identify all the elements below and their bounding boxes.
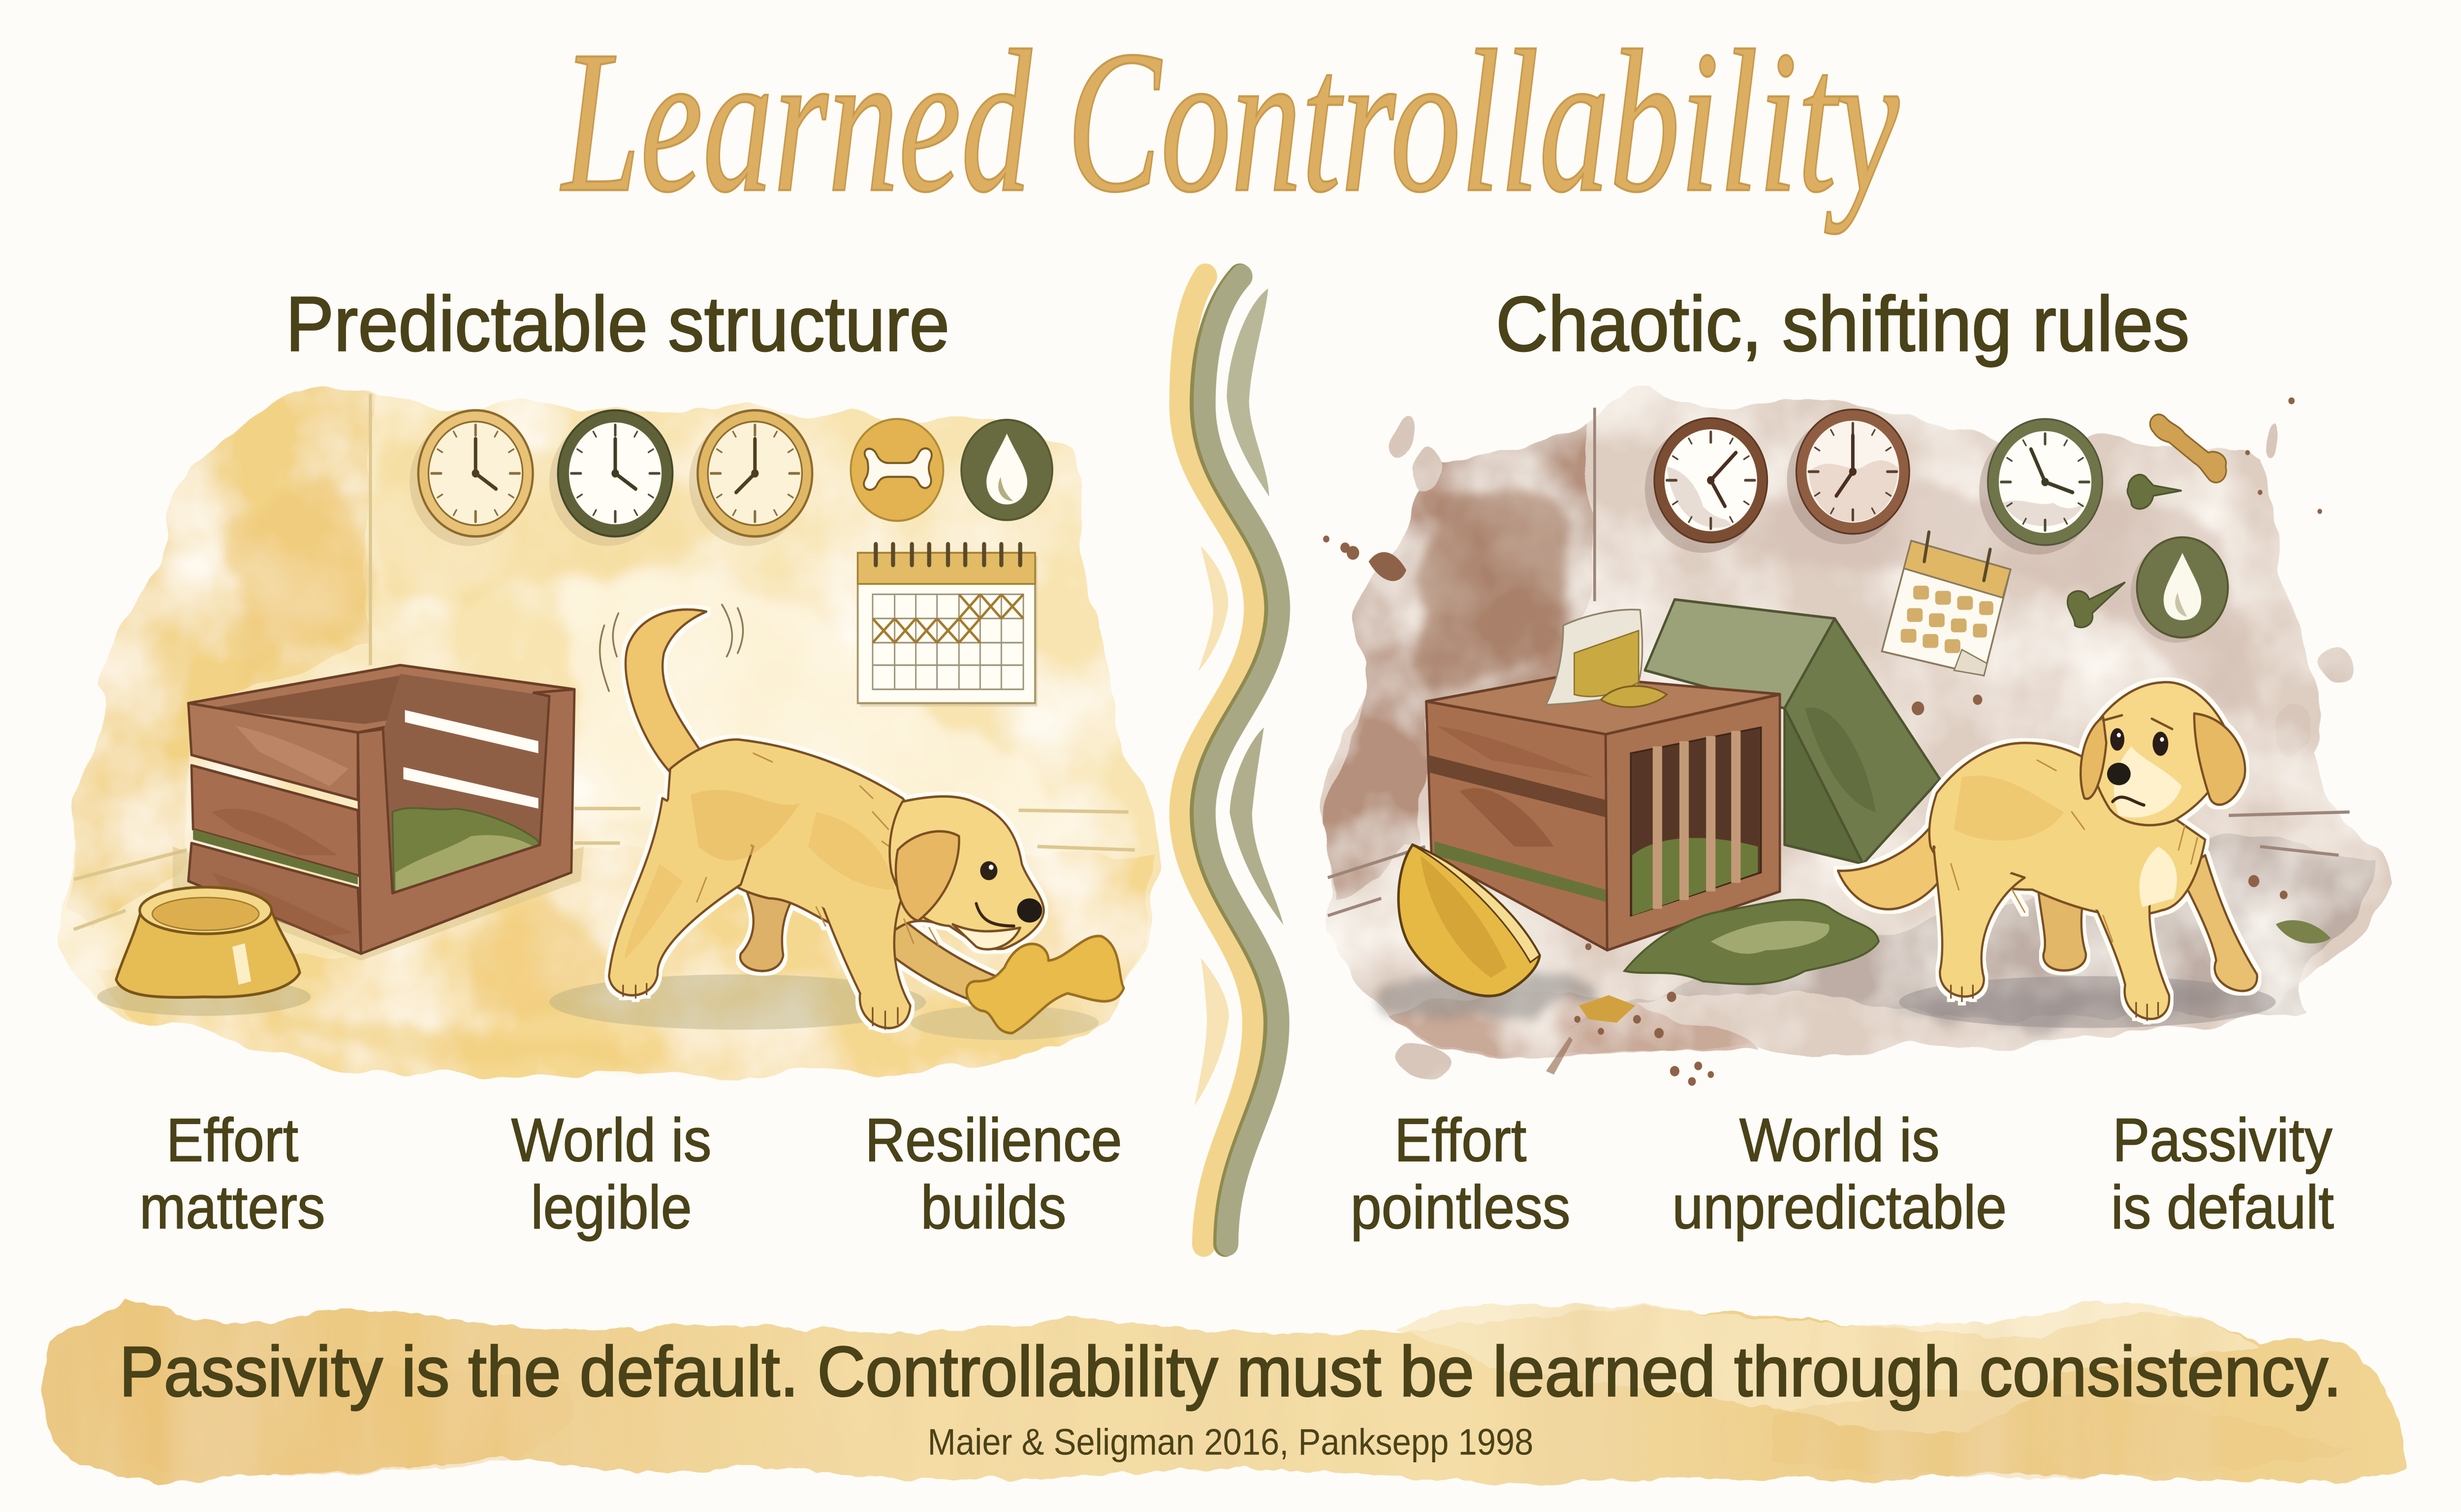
damaged crate [1426,675,1780,950]
yellow wave [1181,277,1256,1244]
label: effort matters: Effort [166,1106,298,1174]
citation: Maier & Seligman 2016, Panksepp 1998 [928,1421,1533,1463]
joints and coat shading [625,753,939,959]
puppy figure [609,609,1044,1030]
label: world is legible: World is [511,1106,711,1174]
crate bars and opening [1631,727,1761,915]
olive wave edge [1201,277,1276,1244]
near rear leg [1934,847,2025,997]
wagging tail motion marks [600,605,743,691]
label: effort matters: matters [139,1173,325,1242]
joints and coat shading [1934,760,2197,942]
food bowl [97,887,311,1016]
tipped bowl [1398,845,1540,996]
label: effort pointless: pointless [1351,1173,1571,1242]
body [667,739,981,942]
near rear leg [609,798,754,995]
puppy: happy, playing [549,609,1099,1040]
title: Learned Controllability [560,8,1900,235]
watercolor wash: muddy mauve room [1323,390,2394,1086]
face [2110,728,2124,751]
clock 3 [689,410,812,546]
callout banner [44,1299,2406,1486]
crate rim and interior [189,665,574,732]
clock 1 [410,410,533,546]
label: resilience builds: builds [921,1173,1066,1242]
far legs [2037,881,2087,971]
head [890,796,1044,949]
icon: water drop in circle [961,420,1052,520]
mud splatter [1323,397,2331,1086]
clock C [1979,419,2102,555]
near front leg [804,855,914,1028]
far legs [738,873,808,971]
puppy: anxious, passive [1838,682,2276,1028]
label: world is unpredictable: unpredictable [1672,1173,2007,1242]
wall corner and baseboard lines [74,394,1135,929]
banner message: Passivity is the default. Controllability must be learned through consistency. [119,1332,2342,1412]
ear [896,831,959,921]
crate left face slats [189,703,358,800]
crate right frame [358,690,574,954]
wavy divider [1181,277,1283,1244]
label: world is unpredictable: World is [1739,1106,1940,1174]
body [1929,743,2205,915]
icon: flying bone [2150,414,2226,482]
crate front face [1426,701,1607,950]
crate top [1426,675,1780,734]
clock B [1787,410,1909,544]
green bed [392,808,540,893]
toppled green bag [1645,599,1940,864]
chew toy [967,936,1124,1033]
ears [2081,717,2106,799]
clock A [1645,418,1767,553]
icon: broken pin 2 [2067,582,2125,628]
olive wave [1204,277,1279,1244]
label: passivity is default: is default [2111,1173,2334,1242]
icon: broken pin 1 [2127,474,2181,509]
puppy figure [1838,682,2257,1021]
fallen pouch and leaves [1546,610,1667,707]
calendar with crossed days [858,544,1038,707]
panel: predictable scene [60,388,1162,1077]
scattered bed cushion [1624,900,1879,984]
wall and floor lines [1328,408,2350,915]
labels: predictable outcomes [139,1106,1122,1242]
watercolor wash: warm yellow room [60,388,1162,1077]
banner wash [44,1299,2406,1486]
icon: water drop tilted [2131,537,2228,643]
label: passivity is default: Passivity [2113,1106,2333,1174]
tail [1838,812,1959,909]
label: world is legible: legible [531,1173,692,1242]
yellow crescents [1199,546,1228,671]
wooden crate with bed [173,665,584,961]
icon: bone in circle [851,419,943,521]
tilted calendar [1882,532,2011,675]
tail [626,609,706,772]
label: effort pointless: Effort [1394,1106,1526,1174]
labels: chaotic outcomes [1351,1106,2334,1242]
heading: chaotic, shifting rules: Chaotic, shifting rules [1496,280,2189,367]
panel: chaotic scene [1323,390,2394,1086]
head [2089,682,2229,825]
near front leg [2084,881,2169,1019]
clock 2 [549,410,672,546]
crate right face [1606,694,1780,950]
olive crescents [1227,288,1269,497]
label: resilience builds: Resilience [865,1106,1122,1174]
heading: predictable structure: Predictable structure [285,280,949,367]
